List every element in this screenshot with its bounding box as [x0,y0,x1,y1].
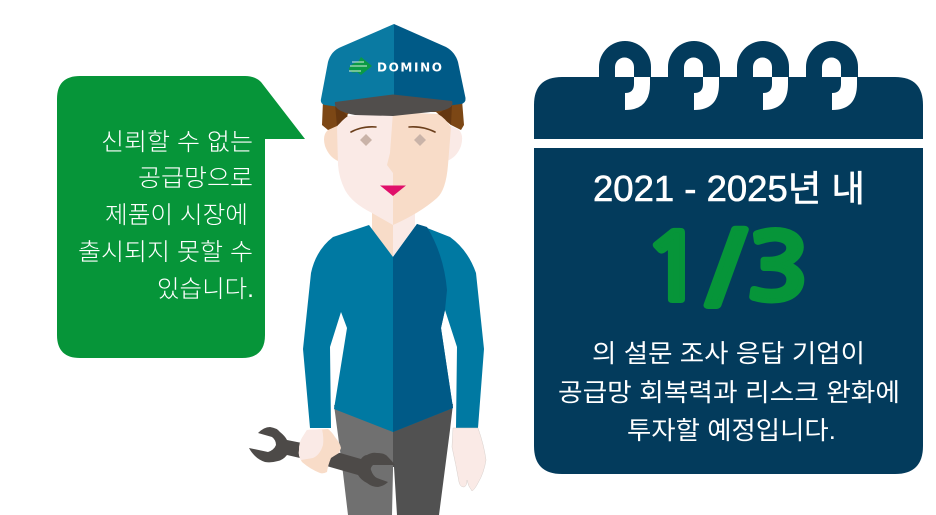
shirt [303,224,484,432]
panel: green speech bubble [57,76,305,358]
left hand [299,429,341,473]
character: worker with wrench [249,24,486,515]
logo mark [349,57,372,75]
neck [372,210,415,260]
hair [322,100,464,130]
right hand [452,428,486,491]
logo wordmark: DOMINO [377,60,442,74]
bubble shape [57,76,305,358]
bubble text: 신뢰할 수 없는 [101,129,253,156]
calendar header [534,77,923,139]
trousers [334,404,453,515]
cap visor [335,94,452,116]
eyes [360,134,426,146]
calendar body text: 투자할 예정입니다. [627,417,836,445]
date heading: 2021 - 2025년 내 [593,168,865,209]
ears [324,125,462,161]
calendar body text: 공급망 회복력과 리스크 완화에 [558,379,900,407]
calendar body text [558,340,900,445]
bubble text: 공급망으로 [138,165,253,192]
calendar body text: 의 설문 조사 응답 기업이 [592,340,865,368]
calendar rings [599,41,858,110]
eyebrows [351,127,435,132]
bubble text: 제품이 시장에 [105,202,248,229]
wrench [249,427,395,487]
cap [321,24,466,116]
calendar body [534,148,923,474]
bubble text: 있습니다. [157,276,254,303]
big fraction: 1/3 [642,223,810,314]
lips [380,186,406,196]
bubble text: 출시되지 못할 수 [78,239,253,266]
face [337,112,451,225]
bubble text [78,129,254,303]
panel: calendar [534,41,923,474]
